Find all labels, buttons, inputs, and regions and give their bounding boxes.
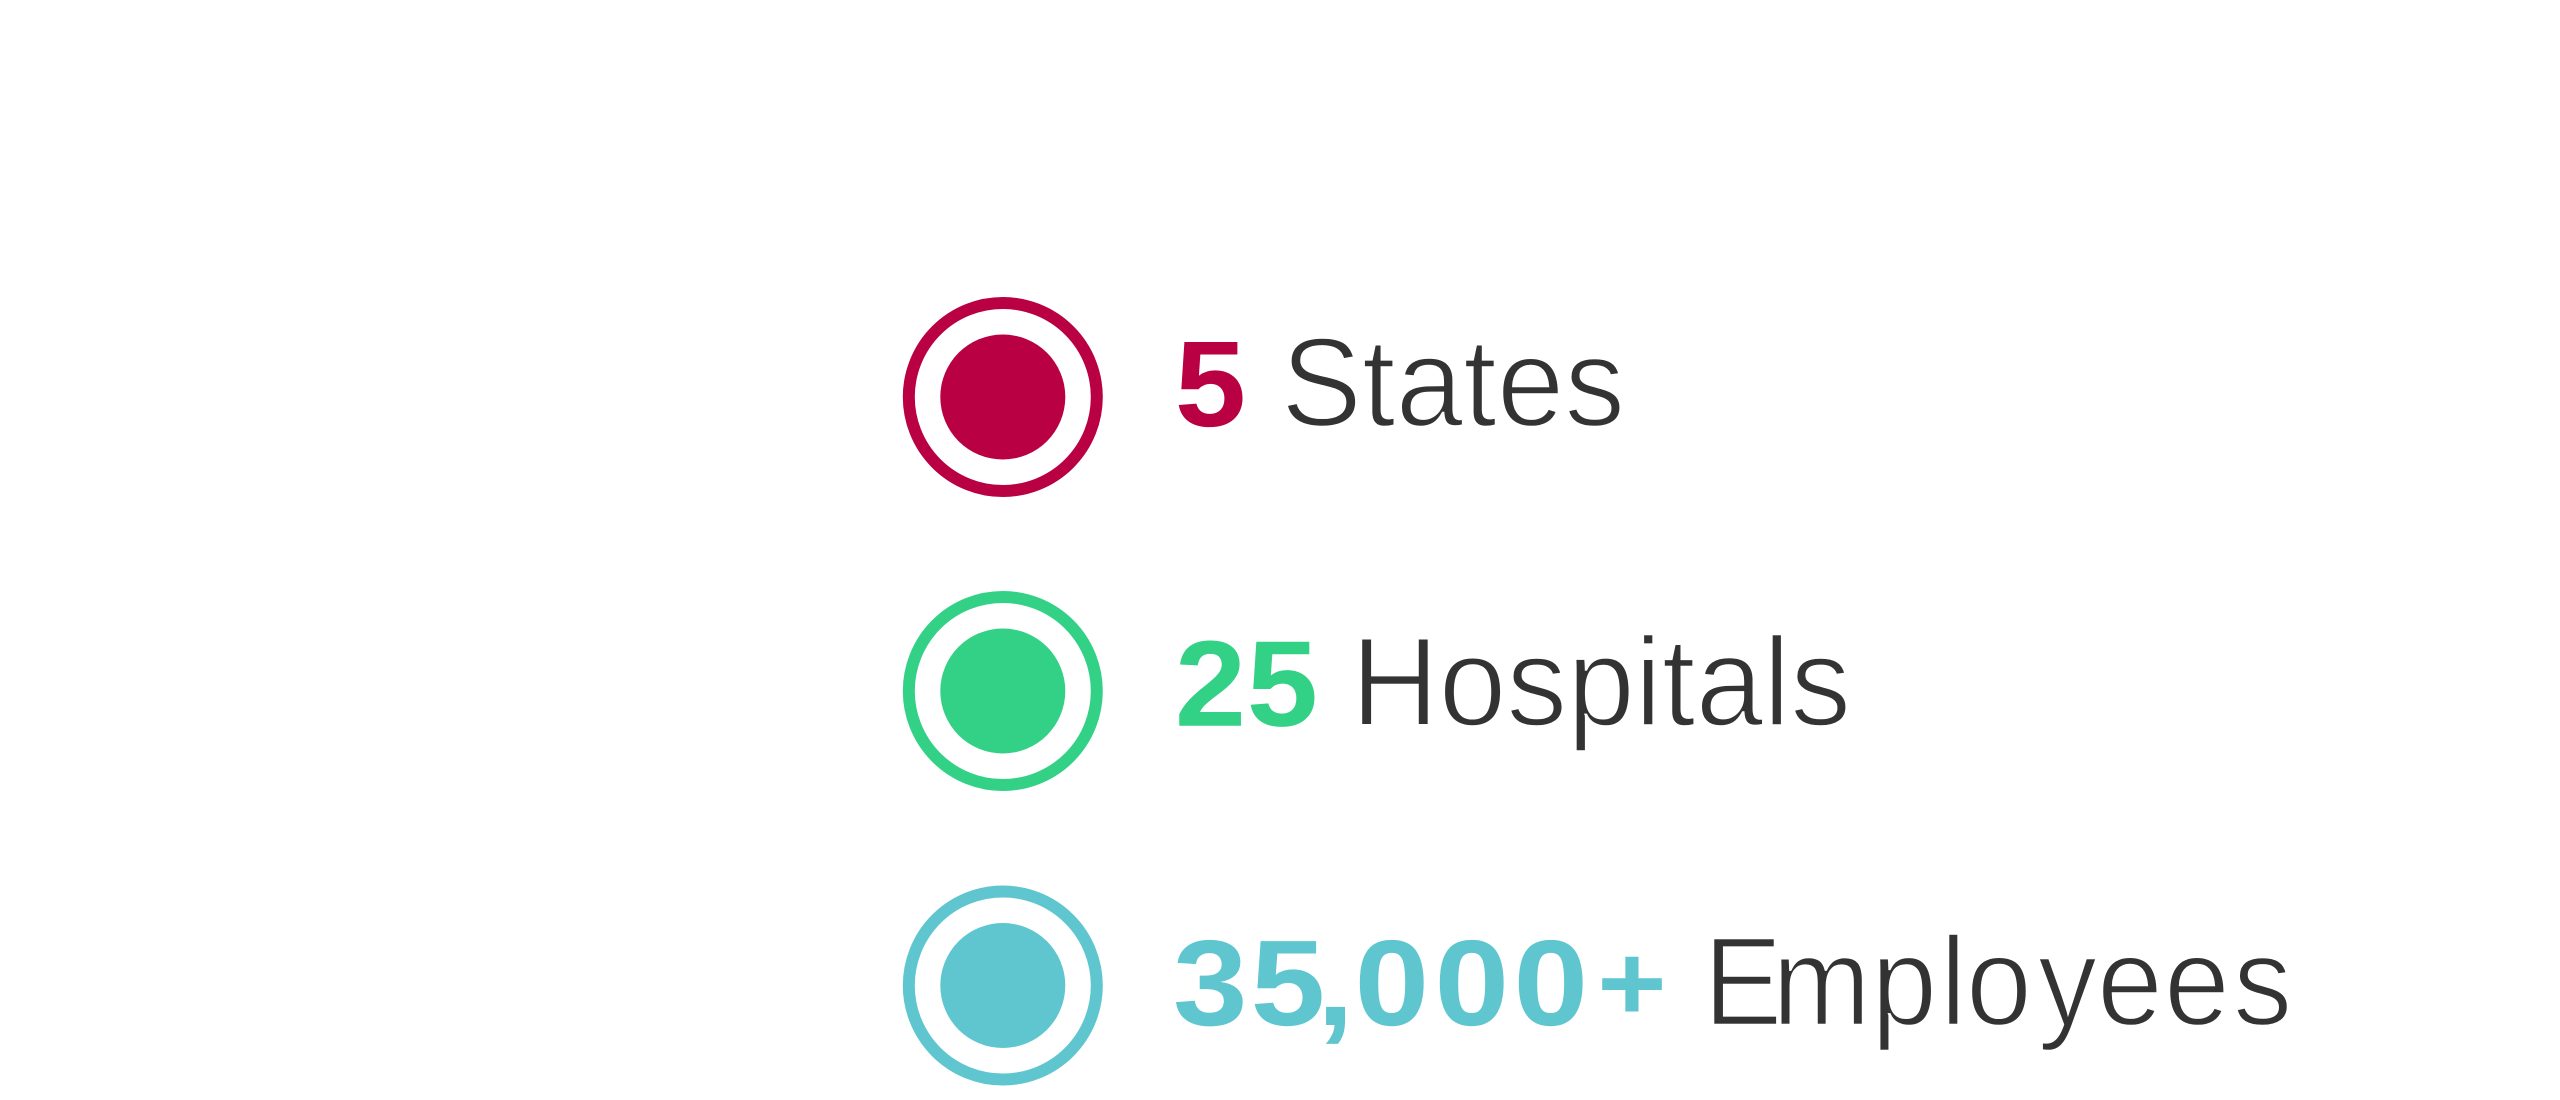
stat row: 25 Hospitals — [909, 597, 1851, 785]
icon: teal target circle — [909, 892, 1097, 1080]
stat row: 35,000+ Employees — [909, 892, 2292, 1080]
stat row: 5 States — [909, 303, 1625, 491]
number: 5: 5 — [1175, 316, 1246, 452]
icon: crimson target circle — [909, 303, 1097, 491]
number: 35,000+: 35,000 — [1173, 916, 1588, 1052]
label: States: States — [1281, 312, 1625, 453]
number: 25: 25 — [1175, 615, 1318, 752]
icon: green target circle — [909, 597, 1097, 785]
label: Hospitals: Hospitals — [1351, 612, 1851, 753]
number: 35,000+: + — [1597, 923, 1667, 1044]
label: Employees: Employees — [1703, 911, 2292, 1052]
